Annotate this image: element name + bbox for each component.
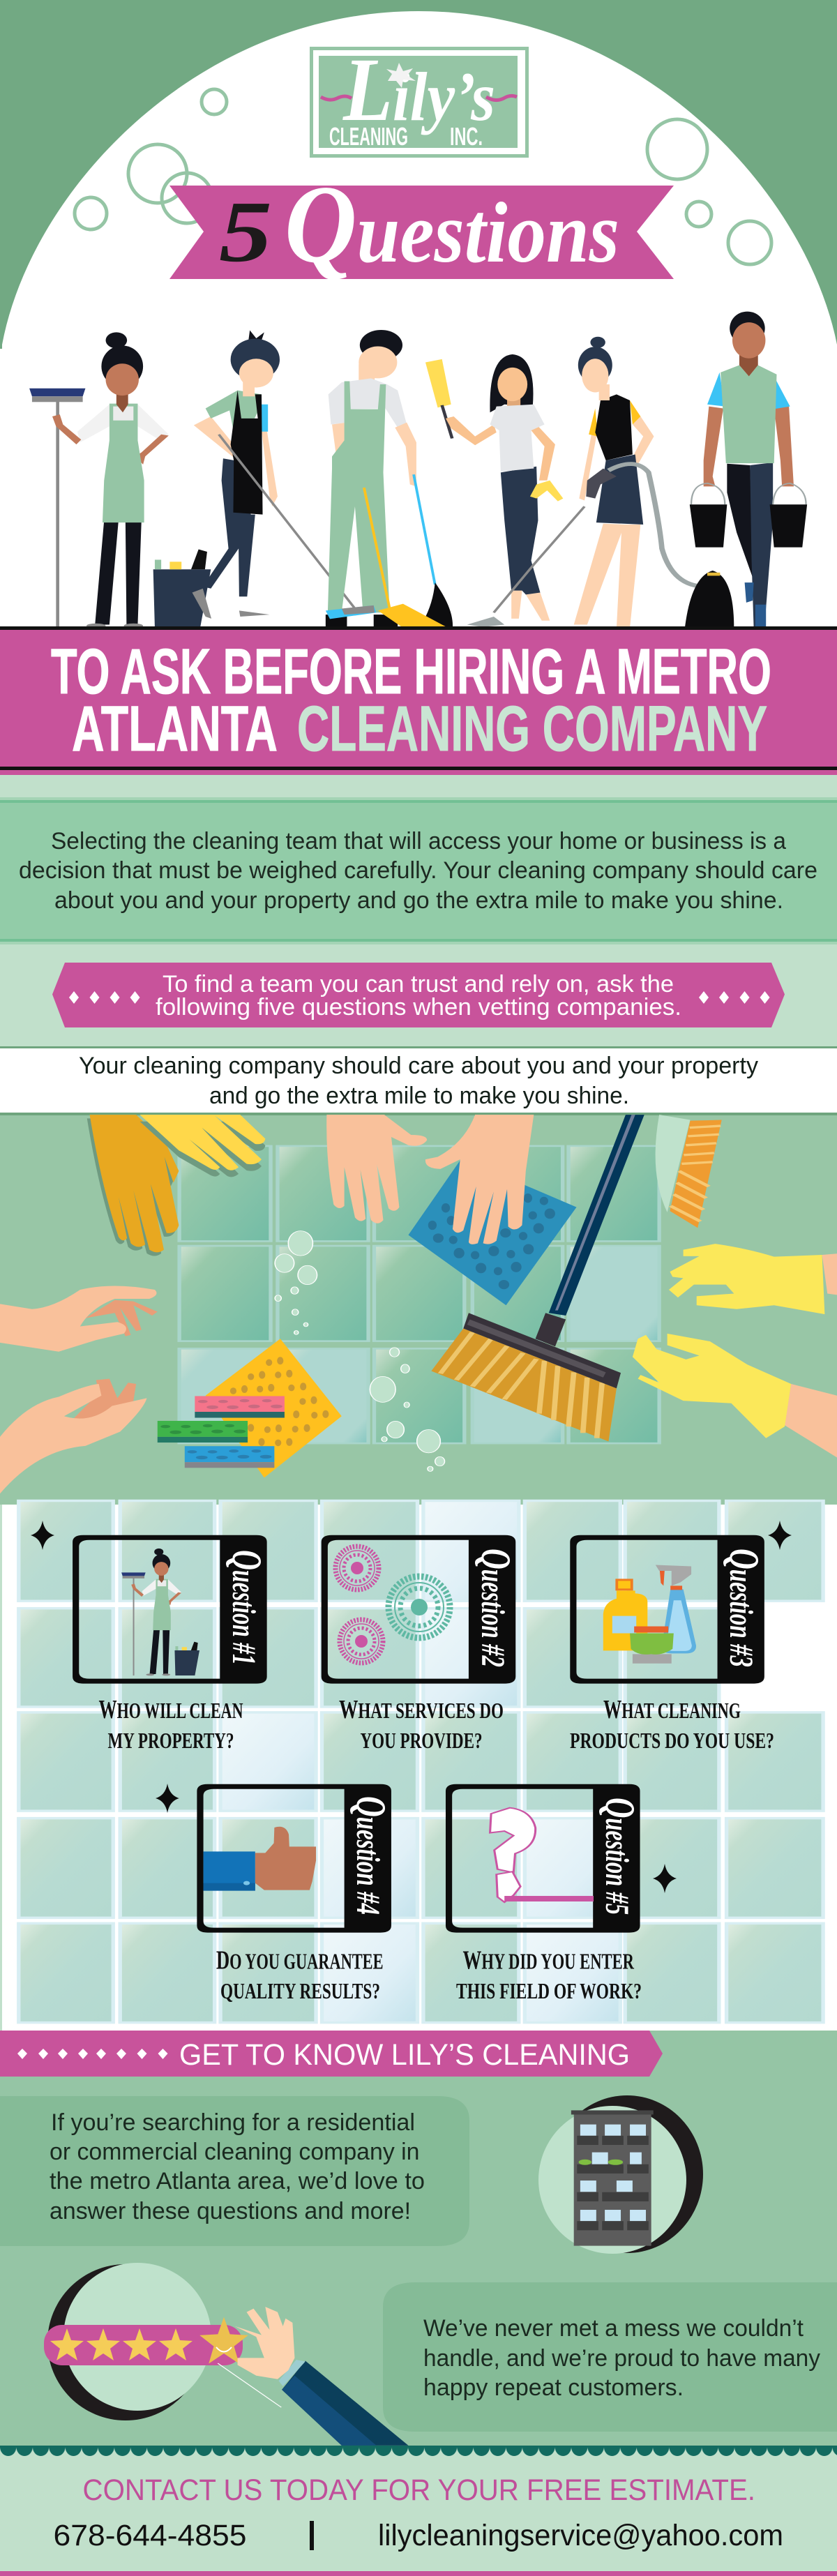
text box: searching: answer these questions and more! [50,2198,411,2224]
question card 2: YOU PROVIDE? [360,1728,483,1753]
logo [310,40,529,158]
get to know panel [0,2031,837,2449]
logo: CLEANING [329,122,408,151]
wall tiles [179,1146,659,1443]
gear icons [335,1546,450,1663]
contact footer: CONTACT US TODAY FOR YOUR FREE ESTIMATE. [82,2473,755,2507]
bare hand far left lower [0,1379,146,1493]
person 3 with broom and dustpan [326,330,453,628]
person 1 with broom and bucket [29,332,211,628]
logo: Lily’s [342,40,495,140]
intro paragraph: about you and your property and go the extra mile to make you shine. [54,887,783,914]
pink ribbon callout [52,963,785,1027]
intro paragraph: Selecting the cleaning team that will access your home or business is a [51,828,787,854]
mini cleaner illustration [121,1549,199,1675]
question card 5: WHY DID YOU ENTER [463,1946,635,1975]
green corners behind dome [0,0,837,349]
person 4 with duster [425,354,563,621]
sparkle [653,1864,677,1893]
sparkle [156,1784,179,1813]
question card 1: Question #1 [224,1550,270,1665]
person 6 with buckets [690,312,807,628]
logo: INC. [450,122,483,151]
yellow glove [140,1115,265,1177]
soap bubbles [275,1231,444,1471]
sparkle [31,1521,54,1550]
title band: ATLANTA [72,693,278,764]
text box: searching: the metro Atlanta area, we’d love to [50,2168,425,2194]
cleaning products icon [603,1565,696,1664]
blue cloth [408,1158,577,1305]
intro panel [0,775,837,1048]
person 5 with vacuum [467,337,734,628]
text box: searching [0,2096,469,2246]
broom [431,1115,644,1442]
cleaning hands illustration [0,1115,837,1506]
question card 4 [197,1784,394,2003]
pink ribbon callout: To find a team you can trust and rely on, ask the [163,971,674,997]
white statement strip [0,1046,837,1115]
question card 5: THIS FIELD OF WORK? [456,1978,642,2003]
contact footer [0,2446,837,2576]
text box: searching: or commercial cleaning company in [50,2139,420,2165]
text box: never met a mess: happy repeat customers. [423,2374,684,2401]
ribbon: 5 Questions: Questions [285,162,619,286]
question card 4: DO YOU GUARANTEE [216,1946,384,1975]
question card 1: WHO WILL CLEAN [99,1695,243,1724]
building icon [538,2095,703,2254]
soap bubbles [75,89,771,264]
bare hand left [326,1115,427,1223]
yellow glove right bottom [633,1334,837,1458]
intro paragraph [19,828,817,914]
yellow cloth [206,1339,342,1477]
contact footer: 678-644-4855 [53,2519,247,2552]
text box: never met a mess [383,2282,837,2432]
ground line [0,626,837,630]
white dome [2,11,837,349]
header panel [0,0,837,630]
bare hand right [425,1115,534,1244]
sparkle [768,1521,792,1550]
rating icon: stars and hand [44,2263,408,2446]
text box: never met a mess: handle, and we’re proud to have many [423,2345,821,2372]
question card 1 [73,1535,270,1753]
yellow glove right top [669,1244,837,1314]
orange glove [87,1115,179,1256]
question card 2 [322,1535,519,1753]
person 2 with mop [193,331,355,619]
question card 3: WHAT CLEANING [603,1695,741,1724]
background tile grid [19,1500,823,2023]
sponges [158,1396,285,1468]
title band [0,630,837,775]
question card 4: Question #4 [348,1796,394,1915]
question card 2: Question #2 [473,1549,519,1667]
question card 1: MY PROPERTY? [107,1728,234,1753]
bare hand far left upper [0,1286,158,1352]
question card 4: QUALITY RESULTS? [220,1978,380,2003]
section ribbon: GET TO KNOW LILY’S CLEANING [179,2038,630,2072]
section ribbon [0,2031,663,2077]
thumbs up icon [204,1827,316,1891]
question card 3 [570,1535,774,1753]
orange brush [656,1115,722,1228]
text box: searching: If you’re searching for a residential [51,2109,415,2136]
question mark hand icon [490,1808,594,1902]
ribbon: 5 Questions: 5 [219,184,272,280]
white statement strip: and go the extra mile to make you shine. [209,1083,629,1109]
cleaning team illustration [29,312,807,628]
contact footer: lilycleaningservice@yahoo.com [378,2519,783,2552]
intro paragraph: decision that must be weighed carefully. Your cleaning company should care [19,857,817,884]
questions panel [0,1500,837,2031]
question card 5: Question #5 [597,1798,643,1915]
text box: never met a mess: We’ve never met a mess we couldn’t [423,2315,804,2342]
pink ribbon callout: following five questions when vetting companies. [156,994,681,1020]
white statement strip: Your cleaning company should care about you and your property [79,1053,759,1079]
question card 3: Question #3 [721,1549,767,1667]
question card 5 [446,1784,643,2003]
question card 2: WHAT SERVICES DO [339,1695,504,1724]
